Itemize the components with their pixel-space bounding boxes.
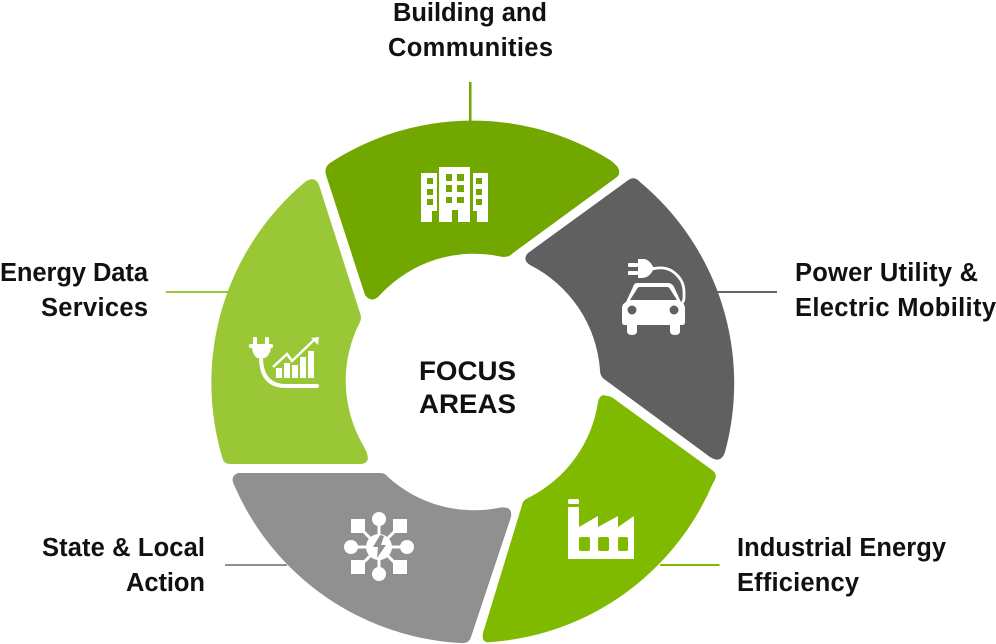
connector: industrial <box>660 564 720 566</box>
icon: plug with growth chart <box>249 337 319 386</box>
segment: power utility and electric mobility <box>525 178 734 460</box>
connector: power utility <box>716 291 777 293</box>
segment: industrial energy efficiency <box>483 395 716 642</box>
label: power utility and electric mobility <box>795 259 996 322</box>
icon: office buildings <box>421 167 488 222</box>
label: state and local action: Action <box>126 569 205 597</box>
icon: electric car with plug <box>622 259 685 335</box>
label: building and communities <box>388 0 553 62</box>
label: state and local action <box>42 534 205 597</box>
icon: energy network hub <box>344 512 414 581</box>
label: energy data services: Services <box>41 294 148 322</box>
connector: state <box>225 564 287 566</box>
segment: state and local action <box>233 473 511 643</box>
center label <box>419 356 516 419</box>
label: energy data services <box>0 259 149 322</box>
label: industrial energy efficiency <box>737 534 947 597</box>
label: power utility and electric mobility: Electric Mobility <box>795 294 996 322</box>
segment: energy data services <box>211 179 368 464</box>
label: industrial energy efficiency: Efficiency <box>737 569 860 597</box>
center label: FOCUS <box>419 356 516 386</box>
label: power utility and electric mobility: Power Utility & <box>795 259 978 287</box>
center label: AREAS <box>419 389 516 419</box>
connector: building <box>469 82 472 124</box>
label: industrial energy efficiency: Industrial Energy <box>737 534 947 562</box>
segment: building and communities <box>326 121 619 300</box>
icon: factory <box>568 499 634 559</box>
label: building and communities: Communities <box>388 34 553 62</box>
connector: energy data <box>166 291 232 293</box>
label: energy data services: Energy Data <box>0 259 149 287</box>
label: state and local action: State & Local <box>42 534 205 562</box>
